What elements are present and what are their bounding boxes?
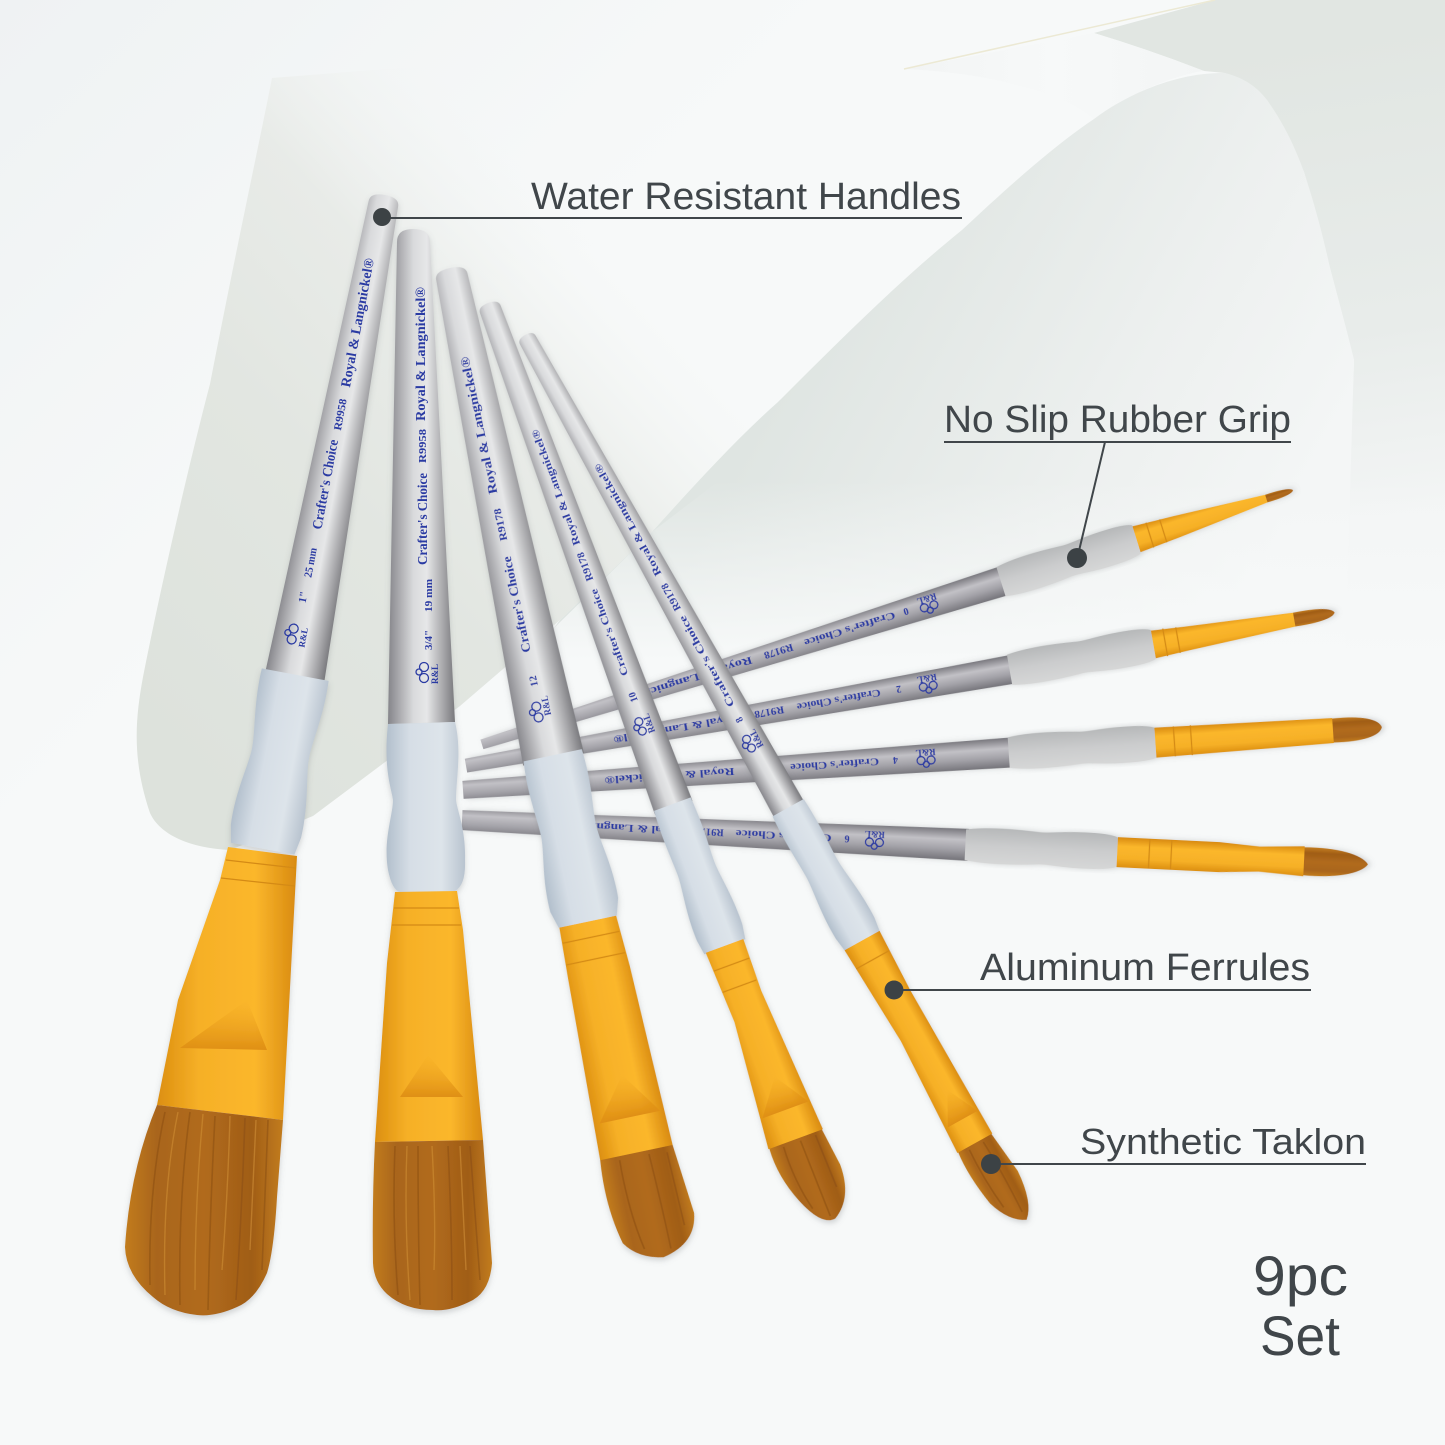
handle imprint: R9958 [417,428,429,463]
bristle highlights [406,1146,466,1300]
leader line [944,442,1291,555]
ferrule bands [1163,626,1180,656]
handle imprint: Royal & Langnickel® [604,765,735,786]
handle imprint: Royal & Langnickel® [414,286,429,421]
handle imprint: 19 mm [423,579,435,612]
ferrule [157,847,297,1120]
grip [1006,627,1157,688]
leader line [894,989,1311,991]
horizontal brush 4 (bottom) [461,802,1369,883]
handle imprint [457,354,553,719]
bristles [125,1105,283,1315]
ferrule bands [1173,725,1192,756]
handle imprint: 6 [844,832,850,844]
ferrule fold [750,1069,808,1118]
callout: water resistant handles [373,176,962,226]
handle imprint [620,591,940,705]
handle imprint: R9178 [695,825,724,838]
ferrule bands [221,860,296,886]
ferrule bands [562,931,625,965]
set size label [1253,1244,1348,1367]
bristle streaks [619,1150,689,1255]
bristle streaks [783,1134,845,1223]
handle [461,804,969,861]
handle imprint: Royal & Langnickel® [457,355,500,496]
handle imprint: Royal & Langnickel® [529,427,583,547]
handle imprint: R&L [539,695,553,716]
paper: curled sheet [500,73,1354,700]
handle [420,262,584,766]
handle imprint: R&L [916,591,938,606]
horizontal brush 2 [463,595,1338,784]
bristle highlights [165,1112,256,1295]
paper: left sheet [137,60,778,850]
grip [227,668,331,855]
vertical brush 2 [373,229,492,1310]
horizontal brush 1 (top) [476,473,1298,762]
bristles [1332,715,1383,743]
handle imprint: Crafter's Choice [796,686,882,713]
handle imprint: 12 [527,674,541,688]
handle imprint: Royal & Langnickel® [592,461,664,578]
grip [650,796,748,955]
ferrule bands [856,951,889,969]
handle [265,189,414,686]
handle imprint: 8 [734,715,746,724]
dot [981,1154,1001,1174]
leader line [382,217,962,219]
logo bell [919,681,938,695]
grip [386,722,465,892]
bristles [1303,847,1369,879]
line two: Set [1260,1304,1340,1367]
handle imprint [604,747,936,786]
dot [1067,548,1087,568]
handle imprint [414,286,440,684]
ferrule bands [714,958,757,993]
vertical brush 3 [412,259,702,1266]
bristles [1265,486,1294,502]
handle [477,567,1008,759]
label: Water Resistant Handles [531,176,961,218]
logo bell [528,701,544,723]
handle imprint: Crafter's Choice [416,473,431,565]
handle imprint: R9958 [332,397,350,431]
callout: synthetic taklon [981,1121,1366,1174]
vertical brush 4 [461,292,857,1232]
handle imprint: R9178 [762,641,795,661]
handle imprint: Crafter's Choice [310,439,342,531]
handle and grip [227,188,420,855]
vertical brush 5 [506,323,1041,1234]
handle imprint: Royal & Langnickel® [339,257,378,389]
handle [462,737,1013,805]
handle imprint: R&L [915,747,936,758]
ferrule [845,931,992,1153]
callout: no slip rubber grip [944,399,1291,568]
ferrule bands [1146,518,1167,547]
handle imprint [560,814,885,846]
handle [463,655,1015,780]
handle imprint [289,256,379,648]
handle imprint: Crafter's Choice [790,755,879,773]
label: No Slip Rubber Grip [944,399,1291,441]
handle imprint: Crafter's Choice [588,587,631,677]
ferrule [1154,716,1334,758]
bristle streaks [969,1141,1023,1220]
line one: 9pc [1253,1244,1348,1307]
leader line [991,1163,1366,1165]
bristles [1293,605,1336,627]
handle imprint: R&L [430,664,440,684]
bristle streaks [394,1146,480,1305]
dot [884,980,904,1000]
ferrule [1116,837,1305,876]
ferrule bands [392,908,461,925]
handle imprint [592,459,766,753]
ferrule fold [180,1000,267,1050]
paper: fade into table [450,480,1445,730]
handle imprint: Royal & Langnickel® [613,711,741,745]
handle imprint: R&L [296,627,310,648]
dot [373,208,391,226]
handle imprint: Crafter's Choice [499,555,534,654]
handle imprint: R9178 [753,703,785,720]
bristles [373,1140,492,1310]
ferrule [552,914,673,1160]
ferrule fold [932,1082,977,1127]
ferrule fold [400,1055,463,1097]
grip [965,827,1118,870]
grip [1007,724,1158,771]
ferrule fold [591,1069,660,1124]
handle imprint: R9178 [575,550,596,583]
handle [510,327,805,819]
handle imprint: Crafter's Choice [735,827,832,844]
logo bell [739,734,757,755]
handle imprint: 2 [895,682,902,694]
bristles [599,1143,702,1266]
handle imprint: R9178 [492,507,510,542]
handle imprint: R&L [865,829,885,840]
ferrule bands [1148,839,1172,870]
logo bell [416,662,428,682]
handle imprint [612,672,939,745]
handle imprint: Crafter's Choice [677,613,737,709]
handle imprint: R&L [747,727,766,750]
logo bell [919,600,940,616]
grip [769,797,882,952]
handle imprint: R9178 [749,762,779,776]
handle imprint: R9178 [659,580,684,613]
handle imprint: R&L [916,672,938,685]
handle imprint: 10 [627,690,641,703]
grip [996,522,1142,599]
handle imprint: Crafter's Choice [802,609,897,649]
logo bell [865,838,884,850]
handle imprint: 0 [902,605,910,617]
handle imprint: 25 mm [302,547,320,579]
vertical brush 1 [125,188,420,1315]
label: Aluminum Ferrules [980,947,1310,989]
logo bell [631,717,647,737]
ferrule [375,891,483,1142]
ferrule [1132,486,1270,552]
handle imprint: 3/4" [423,630,435,650]
handle imprint: 1" [297,590,311,604]
handle imprint: 4 [893,754,898,765]
handle imprint: Royal & Langnickel® [621,654,754,705]
grip [519,748,622,929]
handle [469,296,693,815]
paper: flap top edge [904,0,1215,69]
handle imprint: Royal & Langnickel® [560,818,685,836]
handle imprint: R&L [641,712,657,734]
paper: back corner sheet [1094,0,1445,720]
bristles [957,1132,1041,1233]
logo bell [917,756,936,768]
horizontal brush 3 [462,709,1383,808]
logo bell [283,623,299,645]
handle [388,229,455,724]
handle imprint [529,426,657,737]
label: Synthetic Taklon [1080,1121,1366,1162]
ferrule [1151,606,1297,658]
paper: lifted flap [904,33,1204,119]
callout: aluminum ferrules [884,947,1311,1000]
bristle streaks [150,1112,268,1310]
ferrule [697,936,823,1149]
bristles [769,1128,857,1232]
